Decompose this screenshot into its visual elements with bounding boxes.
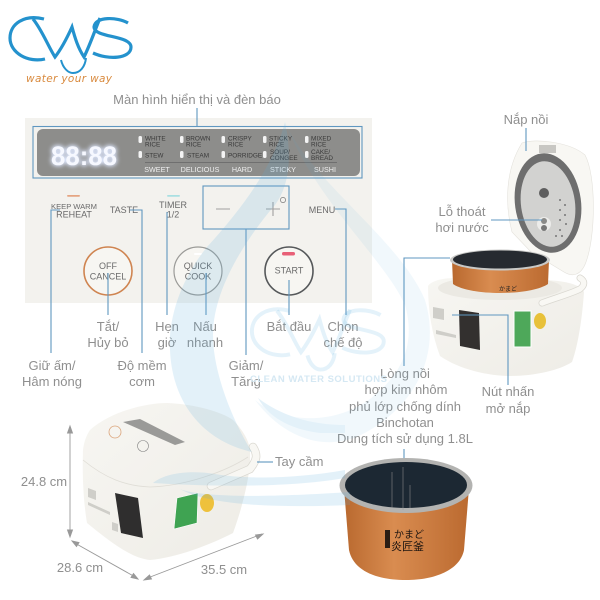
label: inner pot description xyxy=(337,366,473,446)
watermark text: CLEAN WATER SOLUTIONS xyxy=(250,374,387,385)
product: inner pot xyxy=(340,458,472,580)
labels: panel buttons: Chọn xyxy=(327,319,359,334)
labels: open cooker xyxy=(435,112,549,416)
pot logo text: 炎匠釜 xyxy=(391,538,424,554)
dimension labels: 35.5 cm xyxy=(201,562,247,577)
callout line: handle xyxy=(257,461,273,463)
collar xyxy=(438,276,562,300)
label: inner pot description: hợp kim nhôm xyxy=(365,382,447,397)
product: closed rice cooker xyxy=(83,403,256,560)
mode labels: DELICIOUS xyxy=(181,165,220,174)
mode labels: RICE xyxy=(145,142,160,148)
button labels: top row: REHEAT xyxy=(56,210,92,220)
labels: panel buttons: Tăng xyxy=(231,374,261,389)
labels: open cooker: hơi nước xyxy=(435,220,489,235)
labels: panel buttons: Độ mềm xyxy=(117,358,167,373)
labels: panel buttons: Hâm nóng xyxy=(22,374,82,389)
mode labels: CAKE/ xyxy=(311,149,330,156)
labels: open cooker: Nút nhấn xyxy=(482,384,534,399)
mode labels: STICKY xyxy=(270,165,296,174)
base xyxy=(428,278,584,376)
button: start: START xyxy=(275,266,304,276)
mode labels: STICKY xyxy=(269,136,293,142)
button: quick cook: QUICK xyxy=(184,261,212,271)
indicators: small lights xyxy=(67,195,180,197)
heading: display label: Màn hình hiển thị và đèn báo xyxy=(113,92,281,107)
callout lines: panel buttons xyxy=(51,209,346,355)
button frame: minus and plus xyxy=(203,186,289,229)
labels: panel buttons: nhanh xyxy=(187,335,223,350)
inner pot: かまど xyxy=(499,284,517,293)
mode labels: SOUP/ xyxy=(270,149,290,156)
digital readout: 88:88 xyxy=(51,141,117,171)
label: inner pot description: Binchotan xyxy=(376,415,434,430)
label: handle: Tay cầm xyxy=(275,454,323,469)
lid xyxy=(508,141,593,275)
labels: panel buttons: Nấu xyxy=(193,319,217,334)
pot logo text: かまど xyxy=(394,526,424,541)
mode labels: WHITE xyxy=(145,136,166,142)
watermark: pale blue water drop xyxy=(153,122,430,506)
labels: open cooker: Nắp nồi xyxy=(504,112,549,127)
button: quick cook: COOK xyxy=(185,272,211,282)
button labels: top row: TASTE xyxy=(110,205,138,215)
digital readout: 88:88 xyxy=(51,141,117,171)
mode labels xyxy=(138,136,337,174)
callout line: inner pot xyxy=(403,449,405,478)
labels: panel buttons xyxy=(22,319,363,389)
pot logo text xyxy=(385,526,424,554)
panel: display area xyxy=(33,126,362,178)
dimension labels: 28.6 cm xyxy=(57,560,103,575)
handle xyxy=(211,447,256,486)
stickers xyxy=(433,307,546,350)
mode labels: RICE xyxy=(186,142,201,148)
labels: panel buttons: Giảm/ xyxy=(229,358,264,373)
button labels: top row xyxy=(51,200,335,220)
mode labels: RICE xyxy=(269,142,284,148)
labels: panel buttons: cơm xyxy=(129,374,155,389)
mode labels: HARD xyxy=(232,165,252,174)
button labels: top row: KEEP WARM xyxy=(51,202,97,211)
labels: panel buttons: chế độ xyxy=(323,335,363,350)
button: quick cook xyxy=(174,247,222,295)
logo: CWS water your way xyxy=(10,18,131,85)
mode labels: STEAM xyxy=(187,152,209,160)
logo: CWS water your way: water your way xyxy=(26,73,113,85)
mode labels: RICE xyxy=(228,142,243,148)
inner pot xyxy=(450,250,550,293)
dimension arrows xyxy=(68,426,263,580)
rating label xyxy=(115,493,143,538)
button labels: top row: MENU xyxy=(309,205,335,215)
energy sticker xyxy=(174,493,198,529)
side labels xyxy=(88,488,118,532)
watermark: small CWS mark xyxy=(252,309,384,370)
button labels: top row: 1/2 xyxy=(167,210,179,220)
button: off cancel xyxy=(84,247,132,295)
labels: panel buttons: Hẹn xyxy=(155,319,179,334)
label: inner pot description: Dung tích sử dụng 1.8L xyxy=(337,431,473,446)
yellow seal xyxy=(200,494,214,512)
labels: open cooker: Lỗ thoát xyxy=(438,204,486,219)
mode labels: PORRIDGE xyxy=(228,152,262,160)
callout line: display xyxy=(196,108,198,127)
label: inner pot description: phủ lớp chống dính xyxy=(349,399,461,414)
dimension labels: 24.8 cm xyxy=(21,474,67,489)
product: open rice cooker xyxy=(428,141,593,376)
button: start xyxy=(265,247,313,295)
handle xyxy=(542,278,584,303)
labels: panel buttons: Hủy bỏ xyxy=(87,335,129,350)
labels: panel buttons: giờ xyxy=(158,335,177,350)
mode labels: CRISPY xyxy=(228,136,253,142)
button labels: top row: TIMER xyxy=(159,200,187,210)
button: off cancel: OFF xyxy=(99,261,117,271)
labels: open cooker: mở nắp xyxy=(486,401,530,416)
callout lines: open cooker xyxy=(404,128,542,385)
mode labels: STEW xyxy=(145,152,164,160)
button: off cancel: CANCEL xyxy=(90,272,126,282)
mode labels: SWEET xyxy=(144,165,170,174)
mode labels: BREAD xyxy=(311,155,333,162)
mode labels: MIXED xyxy=(311,136,332,142)
mode labels: BROWN xyxy=(186,136,211,142)
labels: panel buttons: Giữ ấm/ xyxy=(28,358,76,373)
labels: panel buttons: Bắt đầu xyxy=(267,319,311,334)
mode labels: CONGEE xyxy=(270,155,298,162)
labels: panel buttons: Tắt/ xyxy=(97,319,120,334)
mode labels: RICE xyxy=(311,142,326,148)
mode labels: SUSHI xyxy=(314,165,336,174)
panel: control panel background xyxy=(25,118,372,303)
dimension labels xyxy=(21,474,247,577)
label: inner pot description: Lòng nồi xyxy=(380,366,430,381)
